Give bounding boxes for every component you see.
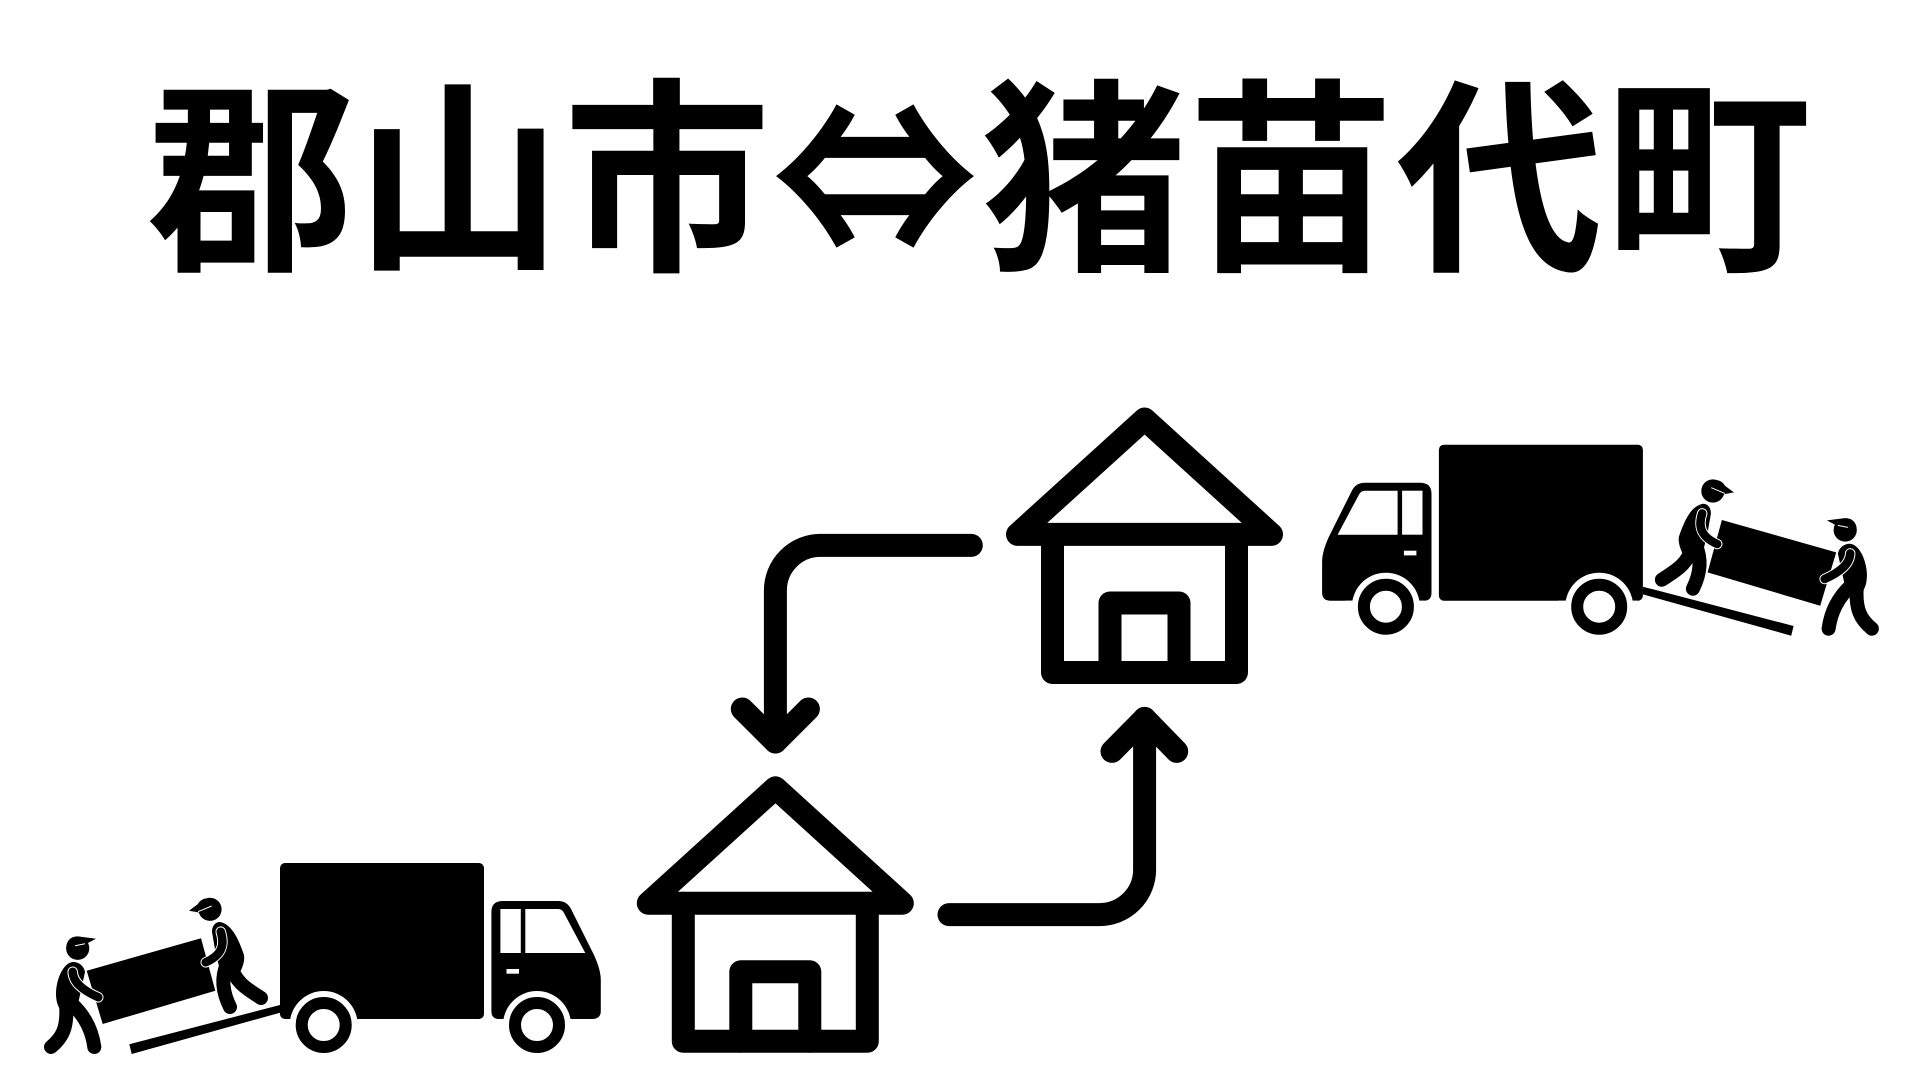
icon: truck with two movers loading, lower left	[51, 863, 601, 1064]
icon: upper house	[1018, 419, 1272, 672]
icon: lower house	[648, 788, 902, 1041]
title: 郡山市⇔猪苗代町	[148, 14, 1812, 314]
icon: truck with two movers loading, upper right	[1322, 445, 1872, 646]
arrow: from upper house to lower house	[742, 545, 971, 742]
arrow: from lower house to upper house	[949, 718, 1177, 915]
